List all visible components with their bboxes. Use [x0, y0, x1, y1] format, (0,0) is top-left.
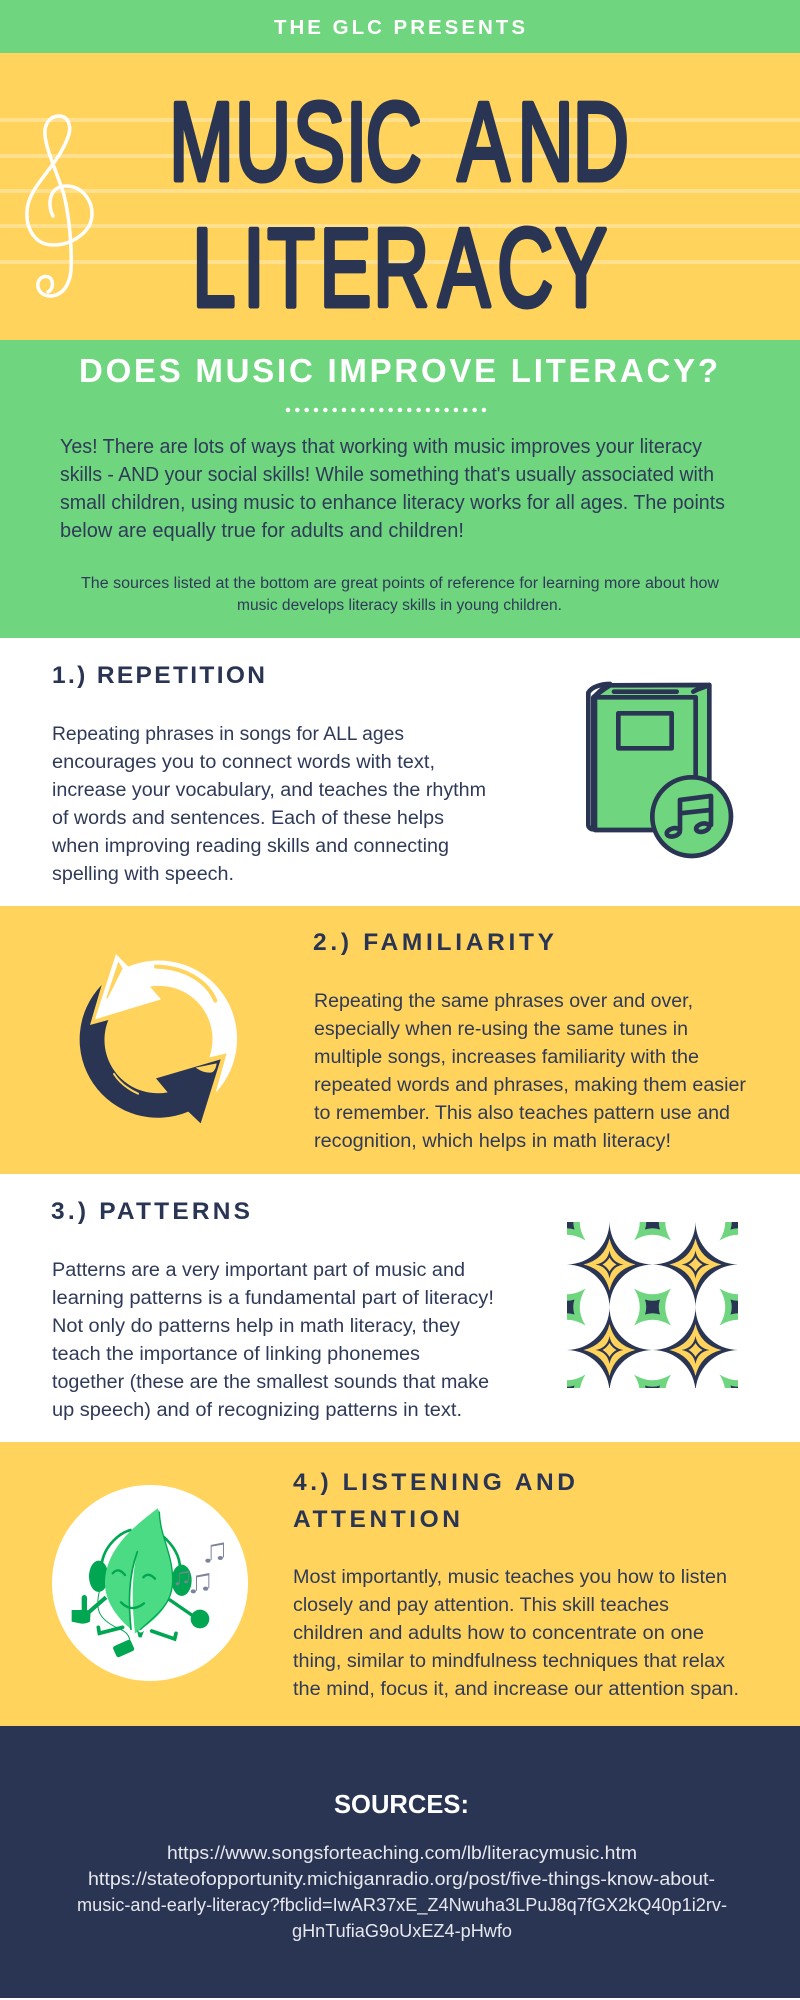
icon: circular arrows — [80, 954, 237, 1123]
body text: encourages you to connect words with text, — [52, 752, 435, 773]
body text — [51, 724, 486, 885]
panel: patterns — [52, 1202, 738, 1420]
body text: multiple songs, increases familiarity with the — [314, 1047, 699, 1068]
heading — [293, 1469, 575, 1533]
body text: especially when re-using the same tunes in — [314, 1019, 688, 1040]
body text: thing, similar to mindfulness techniques that relax — [293, 1651, 726, 1672]
source links: https://www.songsforteaching.com/lb/literacymusic.htm — [167, 1843, 637, 1863]
body text: learning patterns is a fundamental part of literacy! — [52, 1288, 494, 1309]
dotted divider — [288, 408, 484, 412]
intro text: skills - AND your social skills! While something that's usually associated with — [60, 464, 714, 486]
intro text: small children, using music to enhance literacy works for all ages. The points — [60, 492, 725, 514]
source links: gHnTufiaG9oUxEZ4-pHwfo — [292, 1921, 512, 1941]
panel: intro — [0, 340, 800, 638]
body text: Not only do patterns help in math literacy, they — [52, 1316, 461, 1337]
body text — [293, 1567, 739, 1700]
source links: https://stateofopportunity.michiganradio.org/post/five-things-know-about- — [88, 1869, 715, 1889]
body text: teach the importance of linking phonemes — [52, 1344, 420, 1365]
body text: Repeating the same phrases over and over, — [314, 991, 693, 1012]
icon: star pattern — [567, 1222, 738, 1388]
heading: ATTENTION — [293, 1506, 460, 1533]
heading: SOURCES: — [334, 1789, 469, 1819]
heading: 2.) FAMILIARITY — [313, 929, 554, 956]
title: MUSIC AND — [169, 80, 629, 204]
icon: leaf mascot — [52, 1485, 248, 1681]
body text — [314, 991, 747, 1152]
source links: music-and-early-literacy?fbclid=IwAR37xE_Z4Nwuha3LPuJ8q7fGX2kQ40p1i2rv- — [77, 1895, 727, 1916]
body text — [52, 1260, 494, 1421]
body text: Most importantly, music teaches you how to listen — [293, 1567, 727, 1588]
body text: increase your vocabulary, and teaches the rhythm — [52, 780, 486, 801]
heading: DOES MUSIC IMPROVE LITERACY? — [79, 352, 718, 389]
icon: book with music note — [588, 684, 731, 856]
panel: listening and attention — [0, 1442, 800, 1726]
body text: to remember. This also teaches pattern use and — [314, 1103, 730, 1124]
banner text: THE GLC PRESENTS — [274, 16, 525, 39]
panel: familiarity — [0, 906, 800, 1174]
body text: Patterns are a very important part of music and — [52, 1260, 465, 1281]
body text: up speech) and of recognizing patterns in text. — [52, 1400, 462, 1421]
body text: when improving reading skills and connecting — [51, 836, 449, 857]
source links — [77, 1843, 727, 1941]
sources note: The sources listed at the bottom are great points of reference for learning more about how — [81, 575, 720, 592]
panel: repetition — [0, 638, 800, 906]
body text: closely and pay attention. This skill teaches — [293, 1595, 669, 1616]
body text: together (these are the smallest sounds that make — [52, 1372, 489, 1393]
intro text — [60, 436, 725, 542]
panel: sources — [0, 1726, 800, 1998]
panel: title — [0, 53, 800, 340]
body text: children and adults how to concentrate on one — [293, 1623, 704, 1644]
title — [169, 80, 629, 330]
heading: 1.) REPETITION — [52, 662, 265, 689]
body text: recognition, which helps in math literacy! — [314, 1131, 671, 1152]
body text: of words and sentences. Each of these helps — [52, 808, 444, 829]
body text: spelling with speech. — [52, 864, 234, 885]
body text: repeated words and phrases, making them easier — [314, 1075, 747, 1096]
heading: 3.) PATTERNS — [51, 1198, 250, 1225]
heading: 4.) LISTENING AND — [293, 1469, 575, 1496]
body text: Repeating phrases in songs for ALL ages — [52, 724, 404, 745]
top banner — [0, 0, 800, 53]
icon: treble clef — [27, 116, 92, 296]
intro text: below are equally true for adults and children! — [60, 520, 464, 542]
intro text: Yes! There are lots of ways that working with music improves your literacy — [60, 436, 702, 458]
staff lines — [0, 118, 800, 264]
body text: the mind, focus it, and increase our attention span. — [293, 1679, 739, 1700]
sources note — [81, 575, 720, 614]
sources note: music develops literacy skills in young children. — [237, 597, 562, 614]
title: LITERACY — [192, 206, 607, 330]
